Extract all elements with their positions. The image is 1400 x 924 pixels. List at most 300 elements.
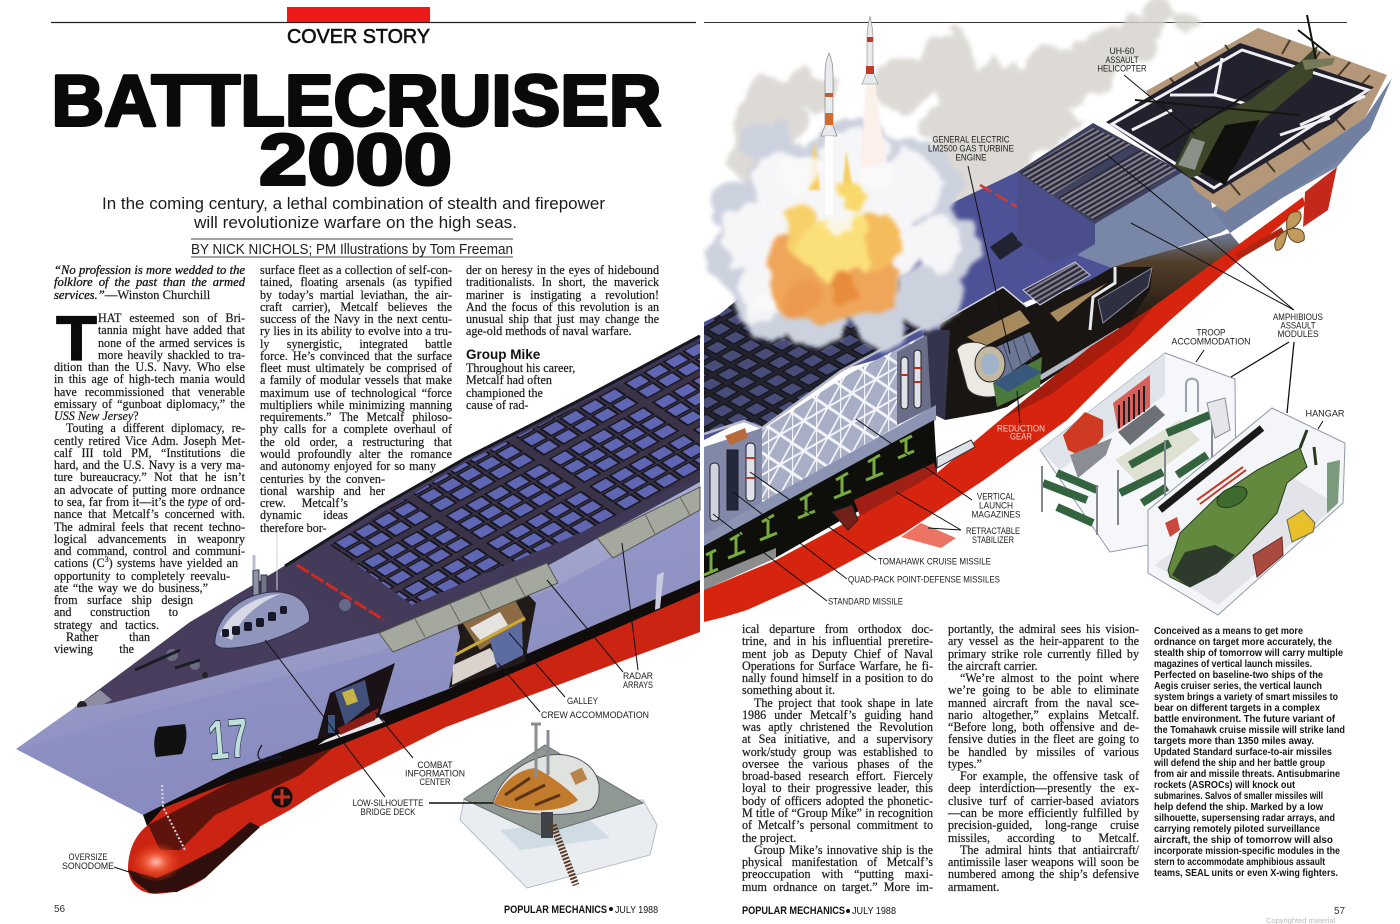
- subtitle: will revolutionize warfare on the high seas.: [193, 213, 517, 232]
- red lower hull: [128, 592, 700, 894]
- front smoke shadow: [708, 121, 982, 350]
- article column 2: a family of modular vessels that make: [260, 373, 452, 387]
- red rudder: [1303, 167, 1337, 227]
- article column 1: dition than the U.S. Navy. Who else: [54, 360, 245, 374]
- bulb dark underside: [128, 822, 260, 893]
- article column 1: and command, control and communi-: [54, 544, 245, 558]
- label: standard missile: STANDARD MISSILE: [828, 596, 903, 608]
- article column 2: the old order, a restructuring that: [260, 435, 452, 449]
- hangar wall: [1017, 172, 1095, 263]
- article column 3 continued: Throughout his career,: [466, 361, 575, 375]
- label: gas turbine engine: [928, 134, 1014, 164]
- article column 2: dynamic ideas: [260, 508, 348, 522]
- label: oversize sonodome: SONODOME: [62, 861, 114, 872]
- bulkhead vents: [1098, 268, 1152, 323]
- article column 1: viewing the: [54, 642, 134, 656]
- label: radar arrays: RADAR: [623, 671, 653, 682]
- right footer: JULY 1988: [852, 905, 896, 917]
- label: gas turbine engine: LM2500 GAS TURBINE: [928, 144, 1014, 154]
- hull number: 17: [206, 706, 251, 772]
- article column 5: numbered among the ship’s defensive: [948, 867, 1139, 881]
- midship deck: [704, 172, 1212, 440]
- article column 5: be handled by missiles of various: [948, 745, 1139, 759]
- article column 1: ture bureaucracy.” Not that he isn’t: [54, 470, 245, 484]
- label: galley: GALLEY: [567, 696, 599, 707]
- article column 5: we’re going to be able to eliminate: [948, 683, 1139, 697]
- label: low-silhouette bridge deck: LOW-SILHOUETTE: [352, 798, 424, 809]
- article column 2: and autonomy enjoyed for so many: [260, 459, 436, 473]
- gas turbine engine: [975, 332, 1040, 382]
- sidebar text: magazines of vertical launch missiles.: [1154, 659, 1312, 670]
- article column 5: [948, 622, 1140, 894]
- article column 5: —can be more efficiently fulfilled by: [948, 806, 1139, 820]
- article column 2: tained, floating arsenals (as typified: [260, 275, 452, 289]
- deck rim: [285, 336, 700, 566]
- label: quad-pack point-defense missiles: QUAD-PACK POINT-DEFENSE MISSILES: [848, 574, 1000, 586]
- module base: [460, 800, 657, 888]
- sidebar text: silhouette, supersensing radar arrays, and: [1154, 813, 1335, 824]
- article column 5: antimissile laser weapons will soon be: [948, 855, 1139, 869]
- headline: BATTLECRUISER: [52, 62, 662, 142]
- red rifle wall: [1113, 375, 1150, 430]
- byline: BY NICK NICHOLS; PM Illustrations by Tom Freeman: [191, 242, 513, 258]
- article column 5: primary strike role currently filled by: [948, 647, 1139, 661]
- label: vertical launch magazines: VERTICAL: [977, 492, 1015, 502]
- article column 1: nance that Metcalf’s concerned with.: [54, 507, 245, 521]
- ship aft section: [704, 0, 1392, 622]
- table: [1118, 405, 1165, 445]
- article column 4: was aptly christened the Revolution: [742, 720, 933, 734]
- ladder: [553, 825, 576, 885]
- article column 1: opportunity to completely reevalu-: [54, 569, 230, 583]
- bow fittings: [74, 599, 351, 716]
- article column 4: [742, 622, 934, 894]
- label: low-silhouette bridge deck: BRIDGE DECK: [360, 807, 416, 818]
- article column 1: in this age of high-tech mania would: [54, 372, 245, 386]
- bridge mast: [253, 520, 277, 602]
- article column 3 continued: Metcalf had often: [466, 373, 552, 387]
- label: retractable stabilizer: [966, 526, 1020, 546]
- tan deck floors: [967, 283, 1107, 347]
- article column 2: surface fleet as a collection of self-con-: [260, 263, 452, 277]
- turbine casing: [957, 342, 1000, 397]
- sidebar text: from air and missile threats. Antisubmarine: [1154, 769, 1340, 780]
- bright red aft hull: [704, 197, 1305, 622]
- article column 2: ry lies in its ability to evolve into a tru-: [260, 324, 452, 338]
- perimeter tile breaks: [1170, 40, 1370, 195]
- grey cell strip: [704, 405, 936, 550]
- label: troop accommodation: [1172, 328, 1251, 348]
- right page leader lines: [713, 75, 1323, 601]
- drop cap: T: [56, 304, 97, 374]
- label: uh-60 assault helicopter: HELICOPTER: [1098, 64, 1147, 74]
- article column 1: none of the armed services is: [98, 336, 245, 350]
- label: troop accommodation: ACCOMMODATION: [1172, 336, 1251, 348]
- magazine missiles: [897, 335, 931, 425]
- article column 1: cations (C3) systems have yielded an: [54, 555, 238, 570]
- article column 4: the project.: [742, 831, 796, 845]
- gear lockers: [1063, 412, 1103, 458]
- flight deck perimeter: [1146, 28, 1387, 212]
- article column 5: nario altogether,” explains Metcalf.: [948, 708, 1139, 722]
- label: amphibious assault modules: MODULES: [1278, 329, 1318, 340]
- label: crew accommodation: CREW ACCOMMODATION: [541, 710, 649, 721]
- article column 4: ment job as Deputy Chief of Naval: [742, 647, 933, 661]
- article column 1: [54, 311, 246, 656]
- green cabinet: [1327, 460, 1340, 513]
- sidebar text: rockets (ASROCs) will knock out: [1154, 780, 1296, 791]
- machinery frame line: [940, 287, 1027, 323]
- array frame: [704, 320, 937, 434]
- article column 5: missiles, according to Metcalf.: [948, 831, 1139, 845]
- article column 1: more heavily shackled to tra-: [98, 348, 245, 362]
- label: vertical launch magazines: LAUNCH: [979, 500, 1013, 512]
- article column 5: manned aircraft from the naval sce-: [948, 696, 1139, 710]
- hangar module: [1148, 408, 1345, 615]
- article column 5: fensive duties in the fleet are going to: [948, 732, 1139, 746]
- article column 1: and construction to: [54, 605, 178, 619]
- emblem: [272, 786, 292, 808]
- title rule right: [704, 22, 1347, 24]
- article column 2: multipliers while minimizing manning: [260, 398, 452, 412]
- lower hull shading: [1113, 233, 1240, 327]
- article column 1: ate “the way we do business,”: [54, 581, 208, 595]
- article column 4: The project that took shape in late: [754, 696, 933, 710]
- hull window: [154, 724, 186, 757]
- smoke wisps over fire: [744, 157, 896, 326]
- article column 1: tannia might have added that: [98, 323, 245, 337]
- article column 3: [466, 263, 660, 338]
- bunks: [1043, 415, 1210, 523]
- label: gas turbine engine: ENGINE: [956, 152, 986, 164]
- label: gas turbine engine: GENERAL ELECTRIC: [932, 134, 1010, 146]
- vertical launch cell array: [330, 342, 700, 605]
- article column 1: calf III told PM, “Institutions die: [54, 446, 245, 460]
- article column 4: trine, and in his influential preretire-: [742, 634, 933, 648]
- rifle rack: [1119, 386, 1144, 428]
- article column 3: unusual ship that just may change the: [466, 312, 659, 326]
- article column 4: at Sea initiative, and a supervisory: [742, 732, 933, 746]
- label: uh-60 assault helicopter: [1098, 46, 1147, 74]
- article column 4: loyal to their progressive leader, this: [742, 781, 933, 795]
- label: amphibious assault modules: AMPHIBIOUS: [1273, 312, 1323, 323]
- label: low-silhouette bridge deck: [352, 798, 424, 818]
- label: amphibious assault modules: ASSAULT: [1280, 320, 1316, 332]
- article column 3 continued: championed the: [466, 386, 543, 400]
- uh-60 helicopter: [1135, 15, 1335, 185]
- article column 1: an advocate of putting more ordnance: [54, 483, 245, 497]
- sidebar text: the Tomahawk cruise missile will strike land: [1154, 725, 1345, 736]
- subtitle: In the coming century, a lethal combination of stealth and firepower: [102, 194, 605, 213]
- article column 2: fleet must ultimately be comprised of: [260, 361, 452, 375]
- article column 2: force. He’s convinced that the surface: [260, 349, 452, 363]
- article column 1: Rather than: [66, 630, 150, 644]
- article column 5: For example, the offensive task of: [960, 769, 1139, 783]
- stowed rails: [1160, 428, 1262, 510]
- access tube: [541, 812, 553, 838]
- article column 2: would profoundly alter the romance: [260, 447, 452, 461]
- label: radar arrays: [623, 671, 653, 691]
- dome shell: [493, 755, 599, 814]
- fireball: [766, 184, 903, 327]
- label: tomahawk cruise missile: TOMAHAWK CRUISE MISSILE: [878, 556, 991, 568]
- sidebar text: [1153, 626, 1345, 879]
- vented deck hatch: [1023, 262, 1090, 305]
- sidebar text: teams, SEAL units or even X-wing fighters.: [1154, 868, 1338, 879]
- pipe: [1186, 379, 1198, 412]
- article column 4: body of officers adopted the phonetic-: [742, 794, 933, 808]
- article column 4: preoccupation with “putting maxi-: [742, 867, 933, 881]
- keel grey band: [704, 548, 776, 590]
- superstructure side band: [1077, 140, 1360, 270]
- article column 4: 1986 under Metcalf’s guiding hand: [742, 708, 933, 722]
- article column 2: tional warship and her: [260, 484, 385, 498]
- right folio: 57: [1334, 906, 1346, 917]
- article column 1: from surface ship design: [54, 593, 193, 607]
- article column 3: age-old methods of naval warfare.: [466, 324, 632, 338]
- generator: [1287, 510, 1315, 542]
- flight deck markings: [1112, 50, 1368, 188]
- sidebar text: battle environment. The future variant of: [1154, 714, 1336, 725]
- sidebar text: aircraft, the ship of tomorrow will also: [1154, 835, 1333, 846]
- label: vertical launch magazines: [972, 492, 1020, 520]
- headline: [52, 62, 662, 200]
- article column 5: The admiral hints that antiaircraft/: [960, 843, 1139, 857]
- label: oversize sonodome: OVERSIZE: [68, 852, 108, 863]
- label: combat information center: INFORMATION: [405, 768, 465, 780]
- radar array panels: [379, 487, 700, 652]
- magazine bulkhead dark: [924, 330, 950, 420]
- module mast: [531, 724, 548, 778]
- rocket exhaust trails: [808, 84, 886, 225]
- label: hangar: HANGAR: [1306, 408, 1345, 420]
- article column 2: [260, 263, 452, 535]
- subtitle: [102, 194, 605, 232]
- front smoke: [718, 129, 959, 311]
- label: combat information center: [405, 760, 465, 788]
- hull side: [16, 482, 700, 815]
- article column 2: craft carrier), Metcalf believes the: [260, 300, 452, 314]
- retractable stabilizer fin: [901, 523, 956, 548]
- sidebar text: Perfected on baseline-two ships of the: [1154, 670, 1323, 681]
- opening quote: folklore of the past than the armed: [54, 275, 245, 289]
- article column 5: “We’re almost to the point where: [960, 671, 1139, 685]
- label: retractable stabilizer: STABILIZER: [972, 535, 1014, 546]
- article column 4: of Metcalf’s personal commitment to: [742, 818, 933, 832]
- sidebar text: bear on different targets in a complex: [1154, 703, 1320, 714]
- dark red hull zone: [854, 463, 937, 516]
- article column 4: broad-based research effort. Fiercely: [742, 769, 933, 783]
- draft marks: [162, 785, 185, 850]
- sidebar text: system brings a variety of smart missiles to: [1154, 692, 1338, 703]
- article column 1: to sea, far from it—it’s the type of ord-: [54, 495, 245, 509]
- white magazine lattice: [761, 335, 931, 500]
- stern side plating: [1212, 78, 1392, 233]
- article column 1: HAT esteemed son of Bri-: [98, 311, 245, 325]
- title rule left: [51, 22, 696, 24]
- label: reduction gear: REDUCTION: [997, 424, 1045, 434]
- hangar helicopter: [1168, 430, 1316, 587]
- bridge dome: [215, 592, 310, 648]
- sidebar text: Conceived as a means to get more: [1154, 626, 1303, 637]
- flight deck surface: [1106, 43, 1374, 194]
- propeller: [1275, 212, 1304, 250]
- article column 5: clusive turf of carrier-based aviators: [948, 794, 1139, 808]
- background smoke: [730, 0, 1197, 215]
- article column 4: work/study group was established to: [742, 745, 933, 759]
- headline: 2000: [259, 120, 452, 200]
- article column 5: portantly, the admiral sees his vision-: [948, 622, 1139, 636]
- forward cell array: [704, 300, 937, 433]
- article column 4: Operations for Surface Warfare, he fi-: [742, 659, 933, 673]
- red dashed deck line: [297, 565, 384, 620]
- module top: [464, 745, 643, 835]
- cream floor: [1115, 420, 1200, 485]
- article column 4: Group Mike’s innovative ship is the: [754, 843, 933, 857]
- article column 3: mariner is instigating a revolution!: [466, 288, 659, 302]
- article column 2: phy calls for a complete overhaul of: [260, 422, 452, 436]
- article column 1: logical advancements in weaponry: [54, 532, 245, 546]
- cutaway machinery space: [940, 267, 1153, 420]
- red crate: [1253, 537, 1283, 577]
- sidebar text: carrying remotely piloted surveillance: [1154, 824, 1320, 835]
- left footer: JULY 1988: [615, 904, 658, 916]
- hull side wedge: [937, 440, 975, 468]
- article column 4: something about it.: [742, 683, 835, 697]
- label: amphibious assault modules: [1273, 312, 1323, 340]
- sidebar text: submarines. Salvos of smaller missiles will: [1154, 791, 1323, 802]
- article column 2: therefore bor-: [260, 521, 327, 535]
- article column 1: The admiral feels that recent techno-: [54, 520, 245, 534]
- sink: [1207, 398, 1230, 438]
- article column 4: mum ordnance on target.” More im-: [742, 880, 933, 894]
- bow bridge module: [460, 724, 657, 888]
- article column 2: by today’s martial leviathan, the air-: [260, 288, 452, 302]
- label: uh-60 assault helicopter: UH-60: [1110, 46, 1134, 57]
- hull shadow: [16, 510, 700, 815]
- bunk frames: [1042, 412, 1212, 535]
- article column 5: precision-guided, long-range cruise: [948, 818, 1139, 832]
- reduction gear: [993, 357, 1042, 407]
- foredeck: [74, 336, 700, 708]
- subheading: group mike: Group Mike: [466, 347, 540, 362]
- sonar glow: [129, 842, 183, 882]
- hull emblem mark: [258, 745, 282, 762]
- black boot stripe: [143, 580, 700, 826]
- article column 1: emissary of “gunboat diplomacy,” the: [54, 397, 245, 411]
- red shade under bulkhead: [1000, 307, 1153, 420]
- red box: [1165, 517, 1180, 537]
- article column 5: “Before long, both offensive and de-: [948, 720, 1139, 734]
- article column 1: hard, and the U.S. Navy is a very ma-: [54, 458, 245, 472]
- label: vertical launch magazines: MAGAZINES: [972, 510, 1020, 520]
- label: reduction gear: [997, 424, 1045, 442]
- article column 5: deep interdiction—presently the ex-: [948, 781, 1139, 795]
- hangar roof: [1017, 123, 1183, 224]
- article column 3: der on heresy in the eyes of hidebound: [466, 263, 659, 277]
- article column 1: have recommissioned that venerable: [54, 385, 245, 399]
- label: combat information center: CENTER: [420, 777, 451, 788]
- sidebar text: stern to accommodate amphibious assault: [1154, 857, 1326, 868]
- label: reduction gear: GEAR: [1010, 432, 1032, 442]
- green beams: [704, 436, 914, 575]
- missile right: [862, 16, 878, 84]
- sidebar text: Updated Standard surface-to-air missiles: [1154, 747, 1332, 758]
- article column 3: traditionalists. In short, the maverick: [466, 275, 659, 289]
- red tubes: [1197, 467, 1246, 504]
- article column 2: requirements.” The Metcalf philoso-: [260, 410, 452, 424]
- article column 1: Touting a different diplomacy, re-: [66, 421, 245, 435]
- troop accommodation module: [1040, 353, 1236, 552]
- opening quote: services.”—Winston Churchill: [54, 288, 210, 302]
- missile left: [821, 53, 837, 215]
- lower hold: [704, 420, 937, 590]
- crew accommodation cutaway: [449, 588, 536, 688]
- striped rear wall: [1040, 353, 1165, 470]
- article column 1: strategy and tactics.: [54, 618, 159, 632]
- red tab: [287, 7, 430, 22]
- right footer: POPULAR MECHANICS: [742, 905, 845, 917]
- article column 1: cently retired Vice Adm. Joseph Met-: [54, 434, 245, 448]
- article column 4: ical departure from orthodox doc-: [742, 622, 933, 636]
- forward missile cells: [704, 428, 762, 540]
- article column 2: crew. Metcalf’s: [260, 496, 348, 510]
- sidebar text: ordnance on target more accurately, the: [1154, 637, 1332, 648]
- sidebar text: incorporate mission-specific modules in the: [1154, 846, 1340, 857]
- sidebar text: will defend the ship and her battle group: [1153, 758, 1325, 769]
- opening quote: “No profession is more wedded to the: [54, 263, 245, 277]
- article column 4: nally found himself in a position to do: [742, 671, 933, 685]
- opening quote: [54, 263, 246, 302]
- article column 3: And the focus of this revolution is an: [466, 300, 659, 314]
- hull side fin: [655, 572, 664, 610]
- article column 4: M title of “Group Mike” in recognition: [742, 806, 933, 820]
- label: troop accommodation: TROOP: [1196, 328, 1226, 338]
- dome interior: [494, 768, 578, 810]
- article column 3 continued: cause of rad-: [466, 398, 528, 412]
- label: oversize sonodome: [62, 852, 114, 872]
- left footer: POPULAR MECHANICS: [504, 904, 607, 916]
- small deck hatch: [990, 232, 1023, 260]
- article column 5: the aircraft carrier.: [948, 659, 1038, 673]
- label: uh-60 assault helicopter: ASSAULT: [1106, 55, 1139, 66]
- propeller shaft: [1237, 230, 1283, 257]
- article column 1: USS New Jersey?: [54, 409, 139, 423]
- dark upper bulb shading: [148, 748, 333, 850]
- hangar vent panels: [1020, 128, 1177, 220]
- section label: COVER STORY: [287, 25, 430, 48]
- article column 2: maximum use of technological “force: [260, 386, 452, 400]
- sidebar text: targets more than 1350 miles away.: [1154, 736, 1314, 747]
- label: radar arrays: ARRAYS: [623, 680, 653, 691]
- label: retractable stabilizer: RETRACTABLE: [966, 526, 1020, 537]
- sidebar text: help defend the ship. Marked by a low: [1154, 802, 1323, 813]
- article column 5: armament.: [948, 880, 999, 894]
- stabilizer bracket: [832, 505, 858, 530]
- article column 5: ary vessel as the heir-apparent to the: [948, 634, 1139, 648]
- article column 2: centuries by the conven-: [260, 472, 385, 486]
- ship forward section: [16, 336, 700, 894]
- white bulkhead frame: [1090, 267, 1115, 330]
- left page leader lines: [114, 543, 638, 872]
- sidebar text: Aegis cruiser series, the vertical launch: [1154, 681, 1322, 692]
- article column 3 continued: [466, 361, 575, 412]
- combat information centre cutaway: [317, 663, 395, 745]
- sidebar text: stealth ship of tomorrow will carry multiple: [1154, 648, 1343, 659]
- article column 5: types.”: [948, 757, 982, 771]
- article column 2: ly synergistic, integrated battle: [260, 337, 452, 351]
- article column 4: oversee the various phases of the: [742, 757, 933, 771]
